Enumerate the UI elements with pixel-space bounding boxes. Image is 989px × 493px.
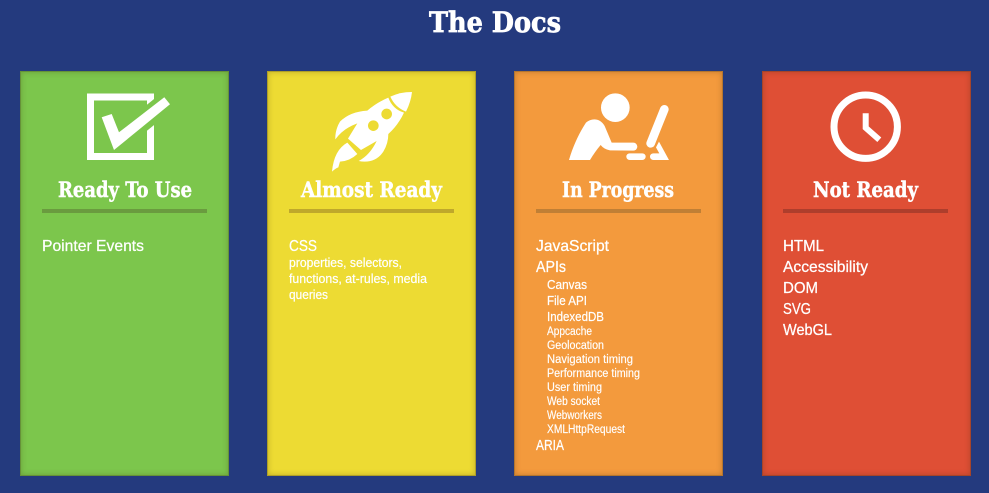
list: javascript and apis: XMLHttpRequest bbox=[547, 424, 626, 436]
list: javascript and apis bbox=[536, 238, 640, 454]
list: not ready items bbox=[783, 238, 868, 339]
list: css: functions, at-rules, media bbox=[289, 272, 427, 286]
list: javascript and apis: Web socket bbox=[547, 396, 601, 408]
list: javascript and apis: File API bbox=[547, 294, 587, 308]
divider: in progress bbox=[536, 209, 701, 213]
list: not ready items: WebGL bbox=[783, 322, 832, 339]
list: javascript and apis: APIs bbox=[536, 259, 566, 276]
list: not ready items: HTML bbox=[783, 238, 824, 255]
panel: not ready bbox=[762, 71, 971, 476]
divider: not ready bbox=[783, 209, 948, 213]
divider: ready to use bbox=[42, 209, 207, 213]
list: javascript and apis: JavaScript bbox=[536, 238, 610, 255]
list: javascript and apis: ARIA bbox=[536, 437, 564, 454]
heading: almost ready: Almost Ready bbox=[300, 177, 443, 202]
icon: clock bbox=[834, 95, 897, 158]
list: css: properties, selectors, bbox=[289, 256, 402, 270]
list: css bbox=[289, 238, 427, 302]
divider: almost ready bbox=[289, 209, 454, 213]
icon: checkbox with check mark bbox=[87, 94, 170, 160]
icon: rocket bbox=[332, 92, 412, 172]
list: javascript and apis: Geolocation bbox=[547, 340, 604, 352]
list: javascript and apis: Appcache bbox=[547, 326, 592, 338]
list: javascript and apis: Performance timing bbox=[547, 368, 640, 380]
list: javascript and apis: User timing bbox=[547, 382, 602, 394]
panel: ready to use bbox=[20, 71, 229, 476]
heading: not ready: Not Ready bbox=[813, 177, 919, 202]
panel: almost ready bbox=[267, 71, 476, 476]
list: not ready items: Accessibility bbox=[783, 259, 868, 276]
list item: pointer events: Pointer Events bbox=[42, 238, 144, 255]
heading: in progress: In Progress bbox=[562, 177, 674, 202]
panel: in progress bbox=[514, 71, 723, 476]
list: not ready items: SVG bbox=[783, 301, 811, 318]
list: javascript and apis: Webworkers bbox=[547, 410, 602, 422]
list: javascript and apis: Navigation timing bbox=[547, 354, 633, 366]
list: not ready items: DOM bbox=[783, 280, 818, 297]
heading: ready to use: Ready To Use bbox=[58, 177, 192, 202]
title: The Docs bbox=[429, 6, 561, 39]
icon: person at computer bbox=[569, 93, 669, 160]
list: css: queries bbox=[289, 288, 328, 302]
list: css: CSS bbox=[289, 238, 317, 255]
list: javascript and apis: Canvas bbox=[547, 278, 587, 292]
list: javascript and apis: IndexedDB bbox=[547, 310, 604, 324]
